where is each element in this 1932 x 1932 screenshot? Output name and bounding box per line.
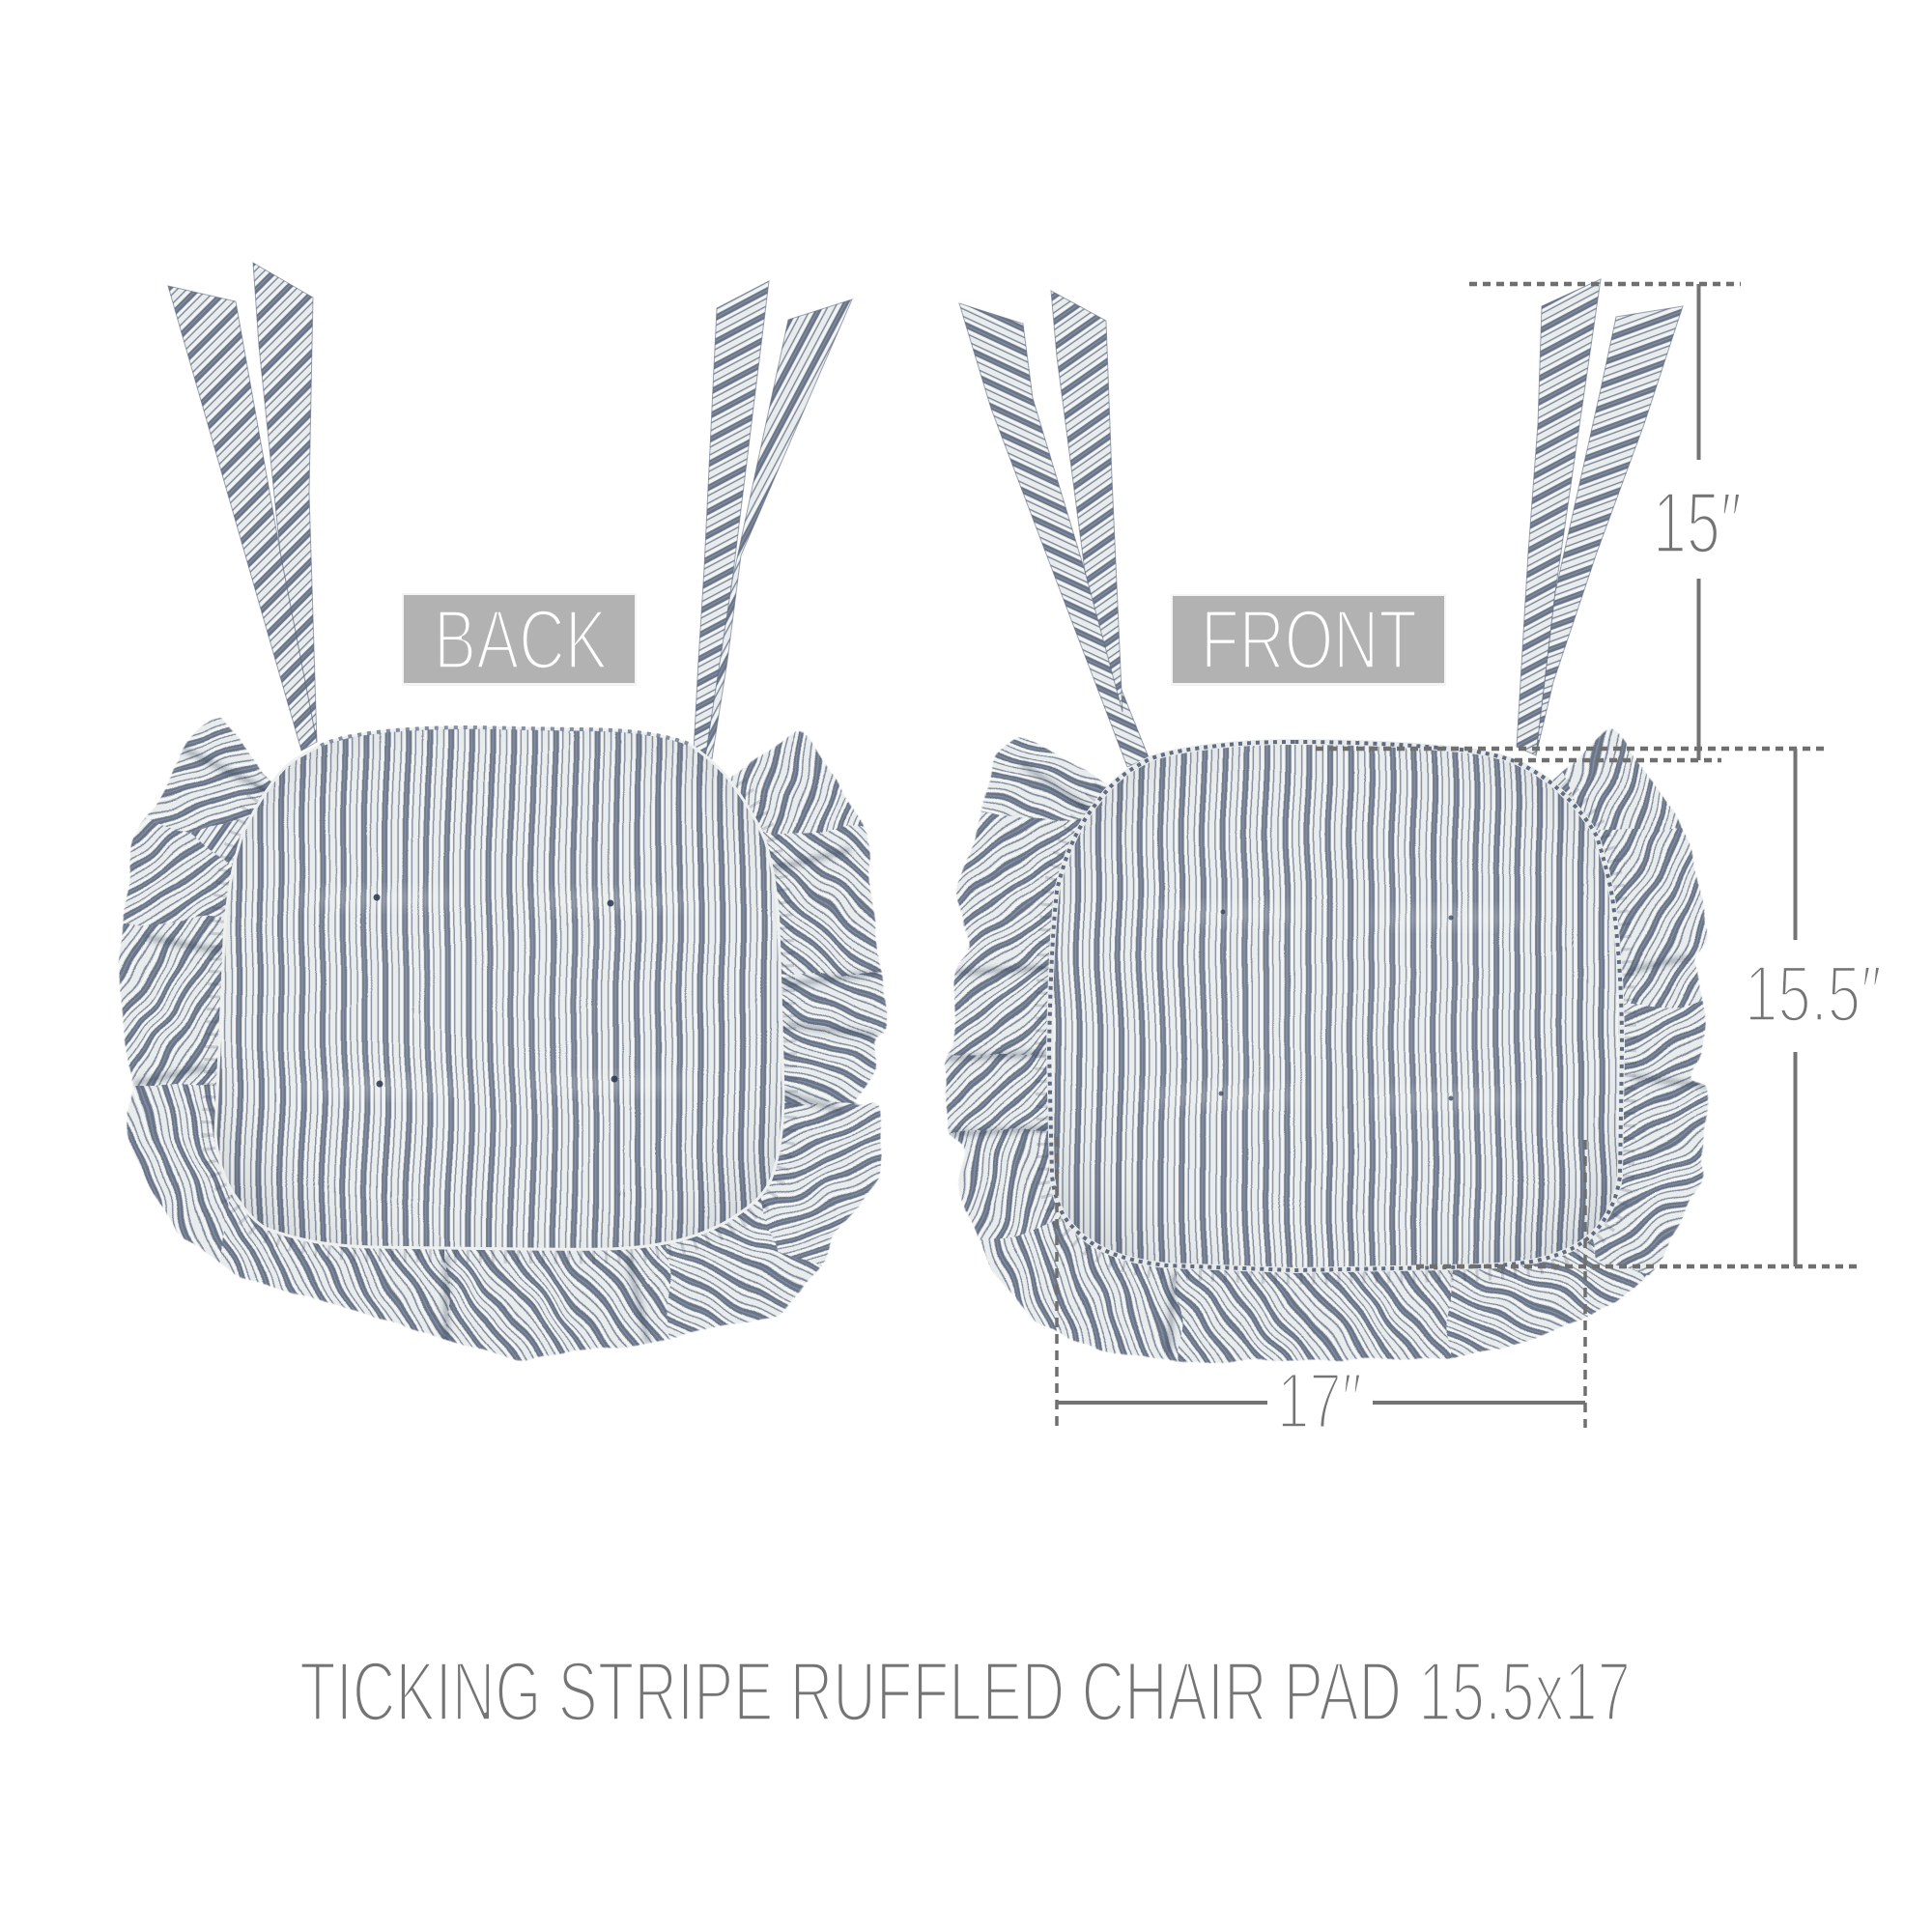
back pad ties — [168, 263, 852, 758]
tie: back upper right C — [694, 281, 769, 758]
ruffle gathers — [1049, 742, 1622, 1270]
back pad cushion — [214, 725, 784, 1251]
tufts — [1134, 906, 1538, 1107]
tie: back upper left B — [253, 263, 317, 742]
front pad cushion — [1046, 739, 1625, 1273]
panel: back view chair pad — [118, 262, 888, 1362]
dimension: pad height 15.5 inches: 15.5″ — [1745, 949, 1882, 1038]
tie: front upper right C — [1517, 279, 1601, 755]
label: FRONT: FRONT — [1201, 593, 1417, 687]
back pad ruffle — [118, 717, 888, 1362]
label: BACK: BACK — [434, 593, 608, 687]
tie: front upper left A — [959, 303, 1149, 767]
ruffle fold shadows — [134, 749, 878, 1352]
dimension: pad width 17 inches: 17″ — [1277, 1357, 1362, 1445]
front pad ruffle — [944, 728, 1710, 1364]
ruffle gathers — [215, 727, 783, 1249]
panel: front view chair pad — [918, 279, 1739, 1401]
tie: back upper left A — [168, 286, 317, 751]
tie: back upper right D — [705, 299, 852, 758]
ruffle fold shadows — [948, 763, 1708, 1352]
tufts — [290, 891, 701, 1094]
dimension: tie length 15 inches: 15″ — [1653, 475, 1742, 572]
front pad ties — [959, 279, 1683, 767]
tie: front upper right D — [1536, 306, 1683, 755]
piping along top — [321, 727, 689, 746]
tie: front upper left B — [1051, 291, 1122, 712]
